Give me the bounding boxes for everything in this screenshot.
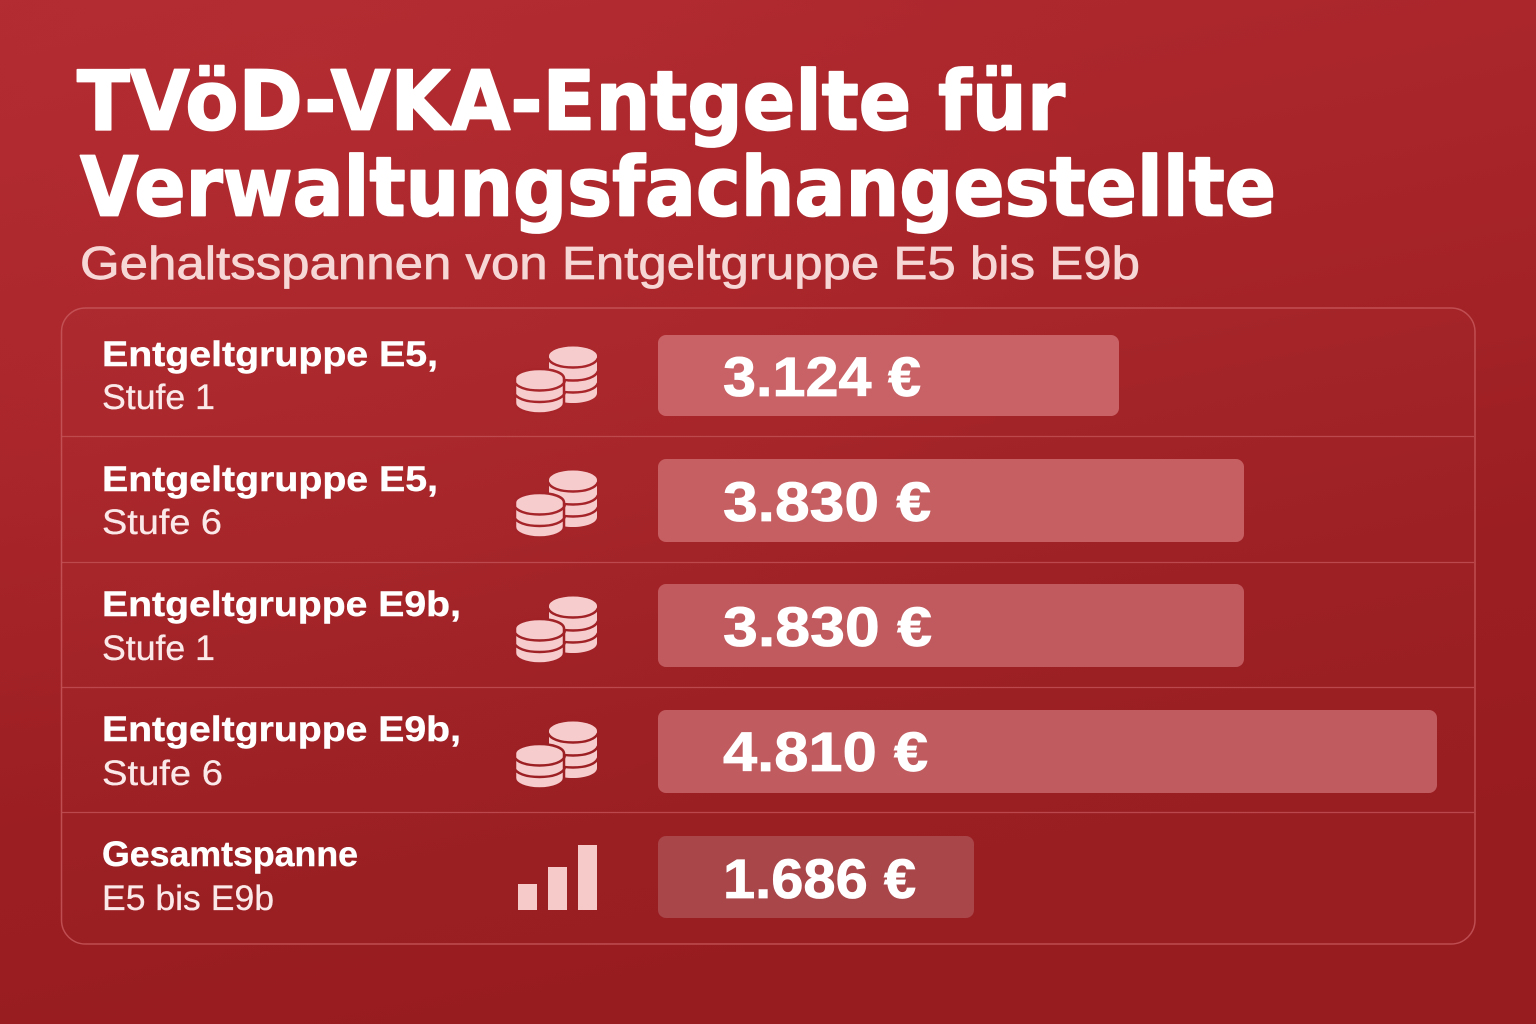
label: E9b Stufe 6 — [102, 710, 461, 793]
bar: 4.810 € — [658, 710, 1437, 793]
bar: 3.124 € — [658, 335, 1119, 416]
label: E5 Stufe 6 — [102, 460, 438, 542]
label: E5 Stufe 6: Entgeltgruppe E5, — [102, 460, 438, 499]
label: E9b Stufe 1: Entgeltgruppe E9b, — [102, 585, 461, 624]
panel: salary table — [62, 308, 1475, 944]
label: E5 Stufe 1 — [102, 335, 438, 417]
icon: coins — [514, 346, 598, 414]
icon: coins — [514, 470, 598, 538]
bar: 1.686 € — [658, 836, 974, 918]
bar: 3.124 €: 3.124 € — [723, 345, 921, 408]
bar: 1.686 €: 1.686 € — [723, 847, 916, 910]
label: E9b Stufe 1: Stufe 1 — [102, 629, 215, 668]
label: Gesamtspanne: E5 bis E9b — [102, 879, 274, 918]
bar: 3.830 € — [658, 584, 1244, 667]
label: E5 Stufe 6: Stufe 6 — [102, 503, 222, 542]
icon: coins — [514, 596, 598, 664]
row: E5 Stufe 1 — [102, 335, 1119, 417]
label: Gesamtspanne: Gesamtspanne — [102, 835, 358, 874]
label: E9b Stufe 1 — [102, 585, 461, 668]
icon: coins — [514, 722, 598, 788]
bar: 3.830 € — [658, 459, 1244, 542]
row: Gesamtspanne — [102, 835, 974, 918]
label: Gesamtspanne — [102, 835, 358, 918]
bar: 3.830 €: 3.830 € — [723, 595, 932, 658]
bar: 3.830 €: 3.830 € — [723, 470, 931, 533]
label: E9b Stufe 6: Stufe 6 — [102, 754, 223, 793]
row: E5 Stufe 6 — [102, 459, 1244, 542]
label: E5 Stufe 1: Stufe 1 — [102, 378, 215, 417]
label: E9b Stufe 6: Entgeltgruppe E9b, — [102, 710, 461, 749]
subtitle: Gehaltsspannen von Entgeltgruppe E5 bis E9b — [80, 237, 1140, 289]
bar: 4.810 €: 4.810 € — [723, 720, 928, 783]
title — [77, 54, 1276, 236]
title: TVöD-VKA-Entgelte für — [77, 54, 1066, 150]
label: E5 Stufe 1: Entgeltgruppe E5, — [102, 335, 438, 374]
title: Verwaltungsfachangestellte — [80, 140, 1276, 236]
row: E9b Stufe 6 — [102, 710, 1437, 793]
row: E9b Stufe 1 — [102, 584, 1244, 668]
icon: bar chart — [518, 845, 597, 910]
